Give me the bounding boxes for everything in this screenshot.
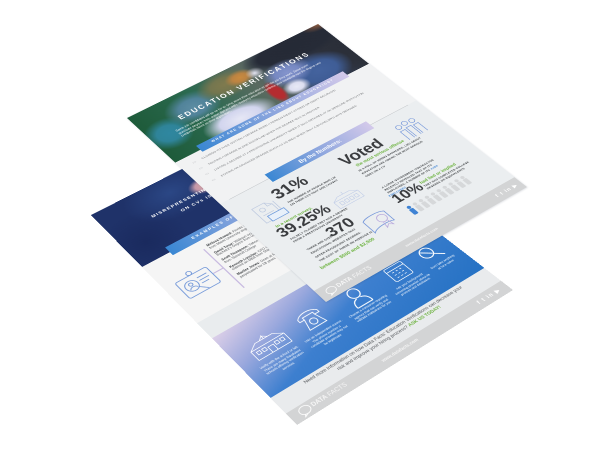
icon: university building (334, 190, 365, 209)
person 2: Bachelor's Degree from University (216, 228, 267, 257)
pictogram: ten people, one highlighted (406, 176, 472, 215)
bullet 3: LISTING A DEGREE AT A PRESTIGIOUS UNIVERSITY WHEN IT WAS OBTAINED AT AN OBSCURE INSTITUTION (214, 92, 365, 172)
banner: examples (165, 172, 316, 255)
light strip (197, 206, 421, 338)
logo (298, 381, 349, 418)
blue label: employees: EMPLOYEES (387, 186, 407, 197)
person 5: Marilee Jones: Dean at MIT (236, 251, 280, 276)
caption: voted: EDUCATION ARE AMONG THE MOST SERIOUS (361, 140, 423, 175)
icon: group of people (395, 118, 428, 140)
footer (286, 281, 513, 425)
caption: large government contractor: EMPLOYEES, A NUMBER OF ITS 4,000 (386, 164, 439, 194)
banner: by the numbers: By the Numbers: (297, 138, 343, 164)
icon: calendar grid (383, 261, 414, 282)
caption: 39.25 percent: FROM A PRESTIGIOUS UNIVERSITY (292, 214, 344, 243)
person 2: David Tovar: Walmart vice president (213, 224, 268, 254)
caption: 370 websites: THE COST OF THESE ON AVERAGE IS (318, 230, 373, 262)
icon: person (346, 288, 374, 309)
list of people (206, 211, 280, 279)
bracket connector (203, 249, 245, 288)
caption: college degrees: DEGREES OR EQUIVALENTS (426, 167, 465, 190)
website: www.datafacts.com (381, 338, 420, 363)
caption: 31 percent: ON THEIR CVS THAT ARE CAUGHT (289, 179, 339, 206)
step text 2: Use an independent source. The phone number a candidate provides may not be legitimate (304, 319, 349, 349)
call to action line 2: risk and improve your hiring process? ASK US TODAY! (336, 305, 442, 371)
hero title: MISREPRESENTING EDUCATION (150, 166, 248, 219)
caption: 370 websites: OFFER FRAUDULENT DEGREES. (314, 231, 362, 258)
hero photo: graduate with tassel (127, 24, 369, 163)
step text 4: Ask your background screening provider about its process and databases (394, 273, 431, 296)
step text 1: Verify with the school or lab. There are many fraudulent schools offering verification services (259, 345, 305, 375)
page: front sheet (education verifications) (127, 24, 527, 302)
page: back sheet (misrepresenting education) (91, 116, 513, 425)
website: www.datafacts.com (405, 227, 439, 248)
step text 3: Choose a consumer reporting agency that can verify and validate institutions for you (348, 294, 392, 323)
hero photo: navy fabric (91, 116, 344, 267)
hero title: EDUCATION VERIFICATIONS (176, 51, 312, 121)
caption: 370 websites: THERE ARE OVER (306, 235, 333, 251)
bullet 1: ▭ (192, 160, 198, 165)
logo mark (298, 405, 312, 418)
caption: 31 percent: THE NUMBER OF PEOPLE WHO LIE (286, 176, 337, 204)
banner: lies about education: WHAT ARE SOME OF THE LIES ABOUT EDUCATION? (211, 79, 335, 143)
bullet 3: ▭ (204, 172, 210, 176)
person 1: from Miami University degree claim (208, 221, 260, 250)
call to action (271, 268, 501, 414)
icon: magnifier (418, 248, 446, 259)
logo mark (326, 286, 337, 296)
green text: lied or implied: had lied or implied (419, 163, 457, 185)
bullet 2: TOUTING A DEGREE IN ONE DISCIPLINE WHEN THE DEGREE WAS IN ANOTHER (207, 106, 321, 166)
bullet 2: ▭ (198, 166, 204, 170)
caption: voted: IN A POLL OF HIRING MANAGERS, LIES ABOUT (357, 136, 422, 172)
person 4: Kenneth Lonchar: CFO of Veritas (228, 239, 280, 269)
person 3: from Stonehill College (223, 244, 258, 264)
stat: 39.25 percent: 39.25% (272, 202, 335, 241)
icon: document with chart (251, 200, 290, 224)
stat word: voted: Voted (335, 136, 388, 168)
hero intro paragraph: Some job candidates will go as far as lying about their education to get the job they want. Some even purchase degrees from online diploma mills. Verifying education confirms your candidate has the degree and credentials listed on their application. (175, 62, 322, 138)
caption: 370 websites: EDUCATIONAL WEBSITES THAT (310, 228, 357, 255)
section divider (229, 105, 408, 199)
step text 5: Don't take anything at face value (430, 254, 455, 270)
icon: diploma (362, 210, 395, 234)
social icons: f t in ▶ (494, 183, 520, 198)
caption: large government contractor: RECENTLY REVEALED THAT OF ITS (384, 164, 433, 191)
icon: school building (250, 332, 292, 361)
banner: by the numbers (265, 121, 374, 182)
person 4: claimed an MBA from Stanford (231, 245, 277, 271)
bullet list of lies (192, 89, 365, 182)
green text: most serious offense: the most serious offense (355, 139, 405, 167)
banner: lies about education (196, 71, 349, 152)
logo name: DATA FACTS (309, 381, 349, 408)
social icons: f t in ▶ (475, 287, 502, 305)
icon: CV with magnifier (175, 267, 221, 299)
caption: college degrees: THEY HAD COMPLETED COLLEGE (423, 161, 470, 187)
statistics background panel (220, 100, 514, 291)
call to action line 1: Need more information on how Data Facts' Education Verifications can decrease your (303, 285, 464, 385)
logo (326, 264, 373, 296)
caption: voted: ONES ON A CV (364, 165, 386, 177)
hero subtitle: ON CVs IS COMMON (179, 178, 242, 213)
person 5: perpetuated for 28 years (239, 257, 277, 279)
stat: 10 percent: 10% (387, 180, 427, 206)
caption: large government contractor: A LARGE GOVERNMENT CONTRACTOR (381, 159, 435, 189)
logo name: DATA FACTS (334, 264, 373, 288)
caption: 39.25 percent: FALSELY CLAIMED THEY HAD A DEGREE (289, 207, 348, 240)
stat: 31 percent: 31% (267, 173, 313, 202)
green label: in a recent survey: In a recent survey, (275, 206, 314, 229)
stat: 370 websites: 370 (321, 215, 359, 240)
footer (314, 177, 527, 302)
green text: cost range: between $500 and $2,500 (318, 236, 376, 270)
blue band: verification steps (212, 219, 484, 398)
icon: telephone (297, 309, 328, 331)
banner: examples: EXAMPLES OF PEOPLE WHO LIED (191, 185, 291, 240)
bullet 4: ▭ (211, 178, 217, 182)
person 1: Melissa Howard: Florida state representative (206, 211, 272, 247)
person 3: Scott Thompson: Yahoo CEO (221, 235, 267, 262)
bullet 4: STATING AN ADVANCED DEGREE (SUCH AS AN MBA) WHEN ONLY A BACHELOR'S WAS OBTAINED (220, 105, 358, 178)
bullet 1: CLAIMING TO HAVE GOTTEN A DEGREE WHEN A PERSON DIDN'T ATTEND OR DIDN'T GRADUATE (201, 89, 337, 160)
